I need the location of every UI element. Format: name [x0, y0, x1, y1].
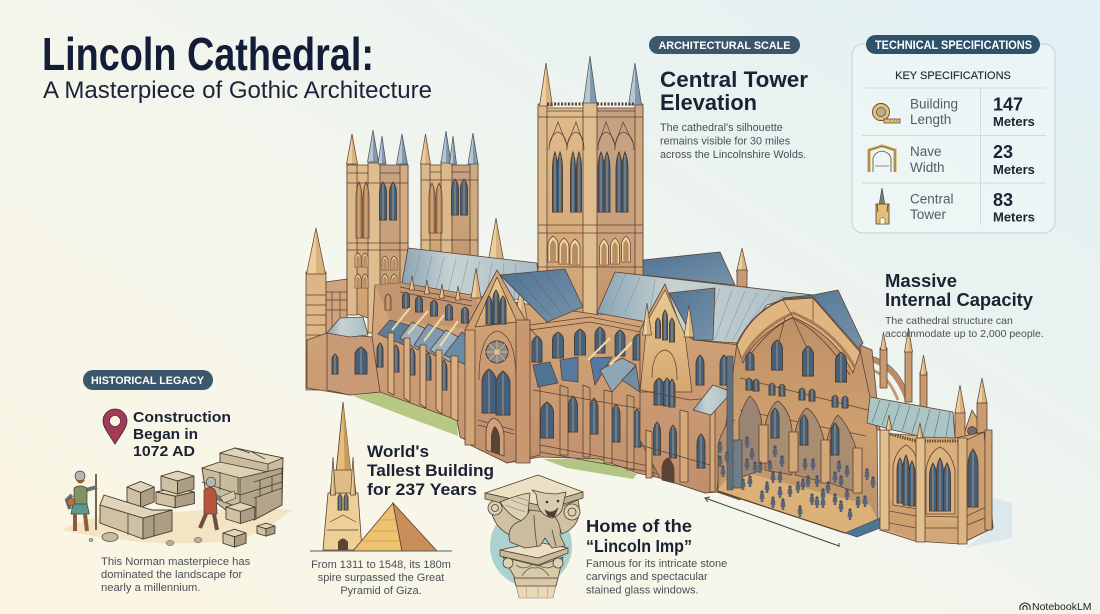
- pill: historical legacy: [83, 370, 213, 390]
- choir windows: [893, 445, 978, 514]
- heading: tallest building: World's: [367, 442, 429, 461]
- heading: key specifications: KEY SPECIFICATIONS: [895, 70, 1011, 82]
- heading: tallest building: for 237 Years: [367, 480, 477, 499]
- stone wall: [202, 448, 283, 524]
- dimension arrow: [705, 497, 839, 547]
- heading: construction: 1072 AD: [133, 444, 195, 460]
- text: silhouette: The cathedral's silhouette: [660, 122, 783, 134]
- upper capital: [485, 475, 583, 536]
- heading: central tower: Elevation: [660, 90, 757, 115]
- head: [532, 490, 566, 518]
- arcade: [718, 396, 856, 492]
- text: capacity: The cathedral structure can: [885, 315, 1013, 327]
- transept door: [486, 418, 504, 456]
- central tower: [538, 56, 643, 318]
- nave windows and buttresses: [332, 292, 470, 421]
- choir piers: [880, 415, 992, 544]
- heading: tallest building: Tallest Building: [367, 461, 494, 480]
- lower capital: [500, 542, 568, 578]
- ground grass: [353, 391, 637, 479]
- text: spire: Pyramid of Giza.: [340, 585, 422, 597]
- icon: central tower: [876, 188, 889, 224]
- pill: technical specifications: TECHNICAL SPECIFICATIONS: [875, 40, 1032, 52]
- text: carvings: stained glass windows.: [586, 584, 699, 596]
- south transept front: [465, 270, 540, 463]
- text: carvings: carvings and spectacular: [586, 571, 708, 583]
- panel: massive internal capacity: [885, 270, 1044, 340]
- title: Lincoln Cathedral:: [42, 28, 374, 80]
- heading: capacity: Internal Capacity: [885, 289, 1034, 310]
- text: norman masterpiece: dominated the landscape for: [101, 569, 242, 581]
- choir east end: [867, 378, 1012, 548]
- icon: nave arch: [869, 146, 895, 172]
- title block: [42, 28, 432, 104]
- illustration: masons and stones: [62, 448, 293, 547]
- icon: map pin: [103, 409, 127, 444]
- cathedral illustration: [306, 56, 1012, 548]
- text: norman masterpiece: nearly a millennium.: [101, 582, 200, 594]
- small spire behind nave: [488, 218, 504, 260]
- row: central tower: Tower: [910, 207, 947, 222]
- text: spire: From 1311 to 1548, its 180m: [311, 559, 451, 571]
- central crossing roofs: [500, 269, 813, 343]
- text: spire: spire surpassed the Great: [318, 572, 444, 584]
- columns: [727, 356, 862, 493]
- nave roof: [402, 248, 540, 300]
- heading: central tower: Central Tower: [660, 67, 808, 92]
- panel: technical specifications: [852, 35, 1055, 233]
- nave upper wall: [375, 283, 478, 330]
- row: central tower: Meters: [993, 210, 1035, 224]
- panel: lincoln imp: [485, 475, 727, 598]
- crowd of people: [718, 436, 875, 520]
- text: silhouette: remains visible for 30 miles: [660, 136, 791, 148]
- gable roof dark: [669, 288, 715, 340]
- flying buttress: [866, 328, 927, 408]
- wing: [500, 493, 530, 522]
- row: central tower: 83: [993, 190, 1013, 210]
- left annex and turret: [306, 228, 347, 390]
- clerestory windows: [746, 340, 846, 382]
- heading: lincoln imp: Home of the: [586, 516, 692, 536]
- row: nave width: [910, 142, 1035, 177]
- pill: historical legacy: HISTORICAL LEGACY: [91, 375, 205, 387]
- row: building length: Length: [910, 112, 951, 127]
- row: nave width: Meters: [993, 162, 1035, 177]
- small door: [662, 458, 674, 483]
- back right roof: [643, 248, 748, 287]
- floor: [717, 470, 878, 533]
- body: [509, 510, 565, 548]
- rear west tower: [420, 131, 478, 263]
- heading: construction: Began in: [133, 427, 198, 443]
- ground shadow: [965, 497, 1012, 548]
- text: silhouette: across the Lincolnshire Wolds.: [660, 149, 806, 161]
- cutaway nave interior: [717, 290, 880, 537]
- row: building length: [910, 94, 1035, 129]
- panel: historical legacy: [62, 370, 293, 594]
- main wall mass: [307, 283, 740, 500]
- row: building length: Meters: [993, 114, 1035, 129]
- spire: [323, 402, 362, 550]
- illustration: gargoyle capital: [485, 475, 583, 598]
- figure: soldier: [67, 471, 97, 531]
- pill: architectural scale: ARCHITECTURAL SCALE: [658, 40, 790, 52]
- column: [514, 578, 558, 598]
- row: building length: 147: [993, 94, 1023, 114]
- panel: tallest building: [310, 402, 494, 597]
- text: capacity: accommodate up to 2,000 people.: [885, 328, 1044, 340]
- choir roof: [867, 397, 955, 438]
- icon: tape measure: [872, 104, 900, 123]
- stone stacks: [89, 471, 275, 547]
- pill: architectural scale: [649, 36, 800, 54]
- front west tower: [346, 130, 408, 333]
- row: nave width: Nave: [910, 144, 942, 159]
- nave pinnacles: [410, 268, 528, 322]
- great roof right: [783, 290, 863, 350]
- section cut infill: [737, 298, 860, 373]
- rose window: [486, 341, 508, 363]
- subtitle: A Masterpiece of Gothic Architecture: [43, 77, 432, 104]
- small lean-to roof: [693, 385, 732, 415]
- gable and turrets: [955, 378, 987, 452]
- row: central tower: Central: [910, 192, 954, 206]
- watermark: NotebookLM: NotebookLM: [1032, 601, 1092, 613]
- floor slab: [845, 518, 880, 537]
- heading: construction: Construction: [133, 410, 231, 426]
- pier right of section: [860, 345, 880, 430]
- pill: technical specifications: [866, 35, 1040, 54]
- row: building length: Building: [910, 96, 958, 112]
- heading: capacity: Massive: [885, 270, 957, 291]
- back wall: [717, 297, 878, 533]
- gargoyle: [500, 490, 566, 548]
- left annex roof: [327, 317, 368, 337]
- text: norman masterpiece: This Norman masterpiece has: [101, 556, 251, 568]
- east transept: [640, 284, 740, 493]
- parapet: [890, 434, 958, 441]
- pyramid: [353, 503, 437, 551]
- triforium: [746, 378, 848, 408]
- text: carvings: Famous for its intricate stone: [586, 558, 727, 570]
- central wall band and windows: [530, 317, 661, 476]
- left annex wall: [327, 333, 380, 395]
- figure: mason: [200, 477, 236, 530]
- row: nave width: Width: [910, 160, 945, 175]
- row: central tower: [910, 190, 1035, 224]
- heading: lincoln imp: “Lincoln Imp”: [586, 536, 692, 556]
- panel: architectural scale: [649, 36, 808, 161]
- illustration: spire and pyramid: [310, 402, 452, 551]
- row: nave width: 23: [993, 142, 1013, 162]
